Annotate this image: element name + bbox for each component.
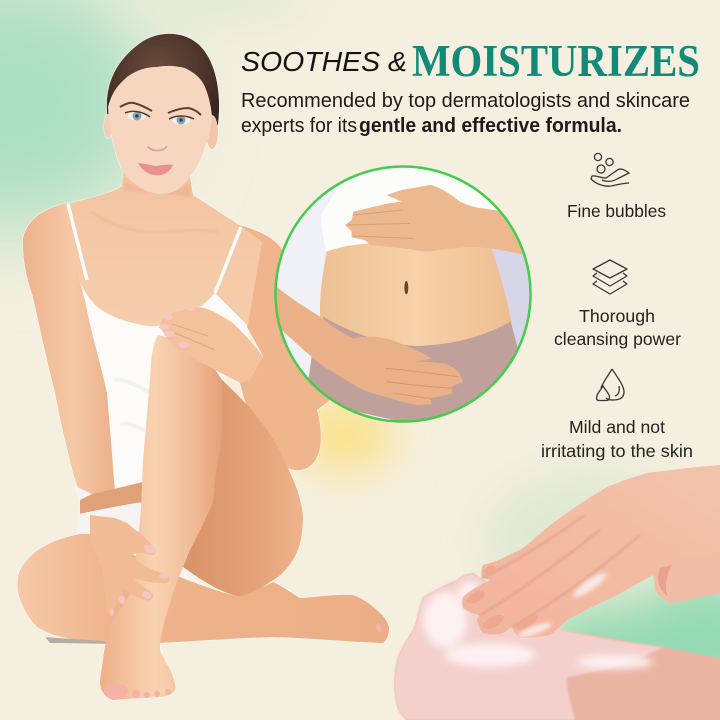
hand on knee	[159, 307, 263, 383]
inset circle: hands on belly	[270, 160, 540, 430]
white tank top	[68, 204, 247, 490]
brows	[120, 103, 152, 111]
fingertips	[467, 566, 538, 630]
toes	[104, 683, 171, 699]
nose	[148, 146, 167, 150]
lower hand and arm	[276, 287, 464, 405]
icon: bubbles on hand	[591, 153, 629, 186]
forearm with foam	[394, 573, 720, 720]
icon: water drops	[596, 369, 624, 401]
soap foam	[394, 573, 663, 720]
briefs	[305, 317, 518, 423]
lower crossed leg	[17, 534, 389, 643]
finger gaps	[480, 515, 640, 627]
heading	[241, 36, 700, 86]
neck shade	[124, 178, 192, 197]
label: thorough cleansing power	[554, 306, 681, 349]
soaping hand	[462, 465, 720, 638]
face	[104, 66, 218, 194]
eyes	[128, 112, 146, 120]
green circle ring	[276, 166, 530, 422]
upper hand and arm	[345, 185, 527, 255]
viewer-left arm	[23, 203, 115, 520]
ears	[104, 114, 112, 138]
description text: experts for its	[241, 115, 357, 137]
description text: gentle and effective formula.	[359, 115, 622, 137]
hair	[107, 34, 219, 125]
circle backdrop	[277, 168, 498, 420]
lips	[138, 163, 173, 175]
finger lines	[385, 368, 458, 398]
white underwear	[75, 486, 201, 587]
woman seated, holding her knee	[17, 34, 389, 700]
rear thigh	[183, 376, 303, 597]
photo: hand lathering foam on arm	[394, 465, 720, 720]
label: fine bubbles: Fine bubbles	[567, 201, 666, 221]
foam streaks on hand	[517, 569, 609, 640]
label: thorough cleansing power: cleansing power	[554, 329, 681, 349]
belly	[320, 243, 512, 347]
navel	[404, 281, 408, 294]
foot toenail	[375, 623, 383, 633]
label: mild and not irritating: irritating to the skin	[541, 441, 693, 461]
label: mild and not irritating	[541, 417, 693, 461]
description text	[241, 90, 690, 137]
front shin and foot	[100, 335, 223, 700]
label: thorough cleansing power: Thorough	[579, 306, 655, 326]
neck and chest	[67, 165, 262, 345]
hand on ankle	[90, 515, 169, 617]
thumb	[654, 582, 720, 603]
waist skin	[80, 482, 143, 515]
white top	[321, 167, 500, 253]
upper arm and forearm resting on knee	[222, 224, 330, 470]
description text: Recommended by top dermatologists and skincare	[241, 90, 690, 112]
heading: soothes: SOOTHES &	[241, 46, 407, 77]
icon: layers	[593, 260, 627, 294]
ground shadow	[45, 637, 112, 644]
label: mild and not irritating: Mild and not	[569, 417, 665, 437]
